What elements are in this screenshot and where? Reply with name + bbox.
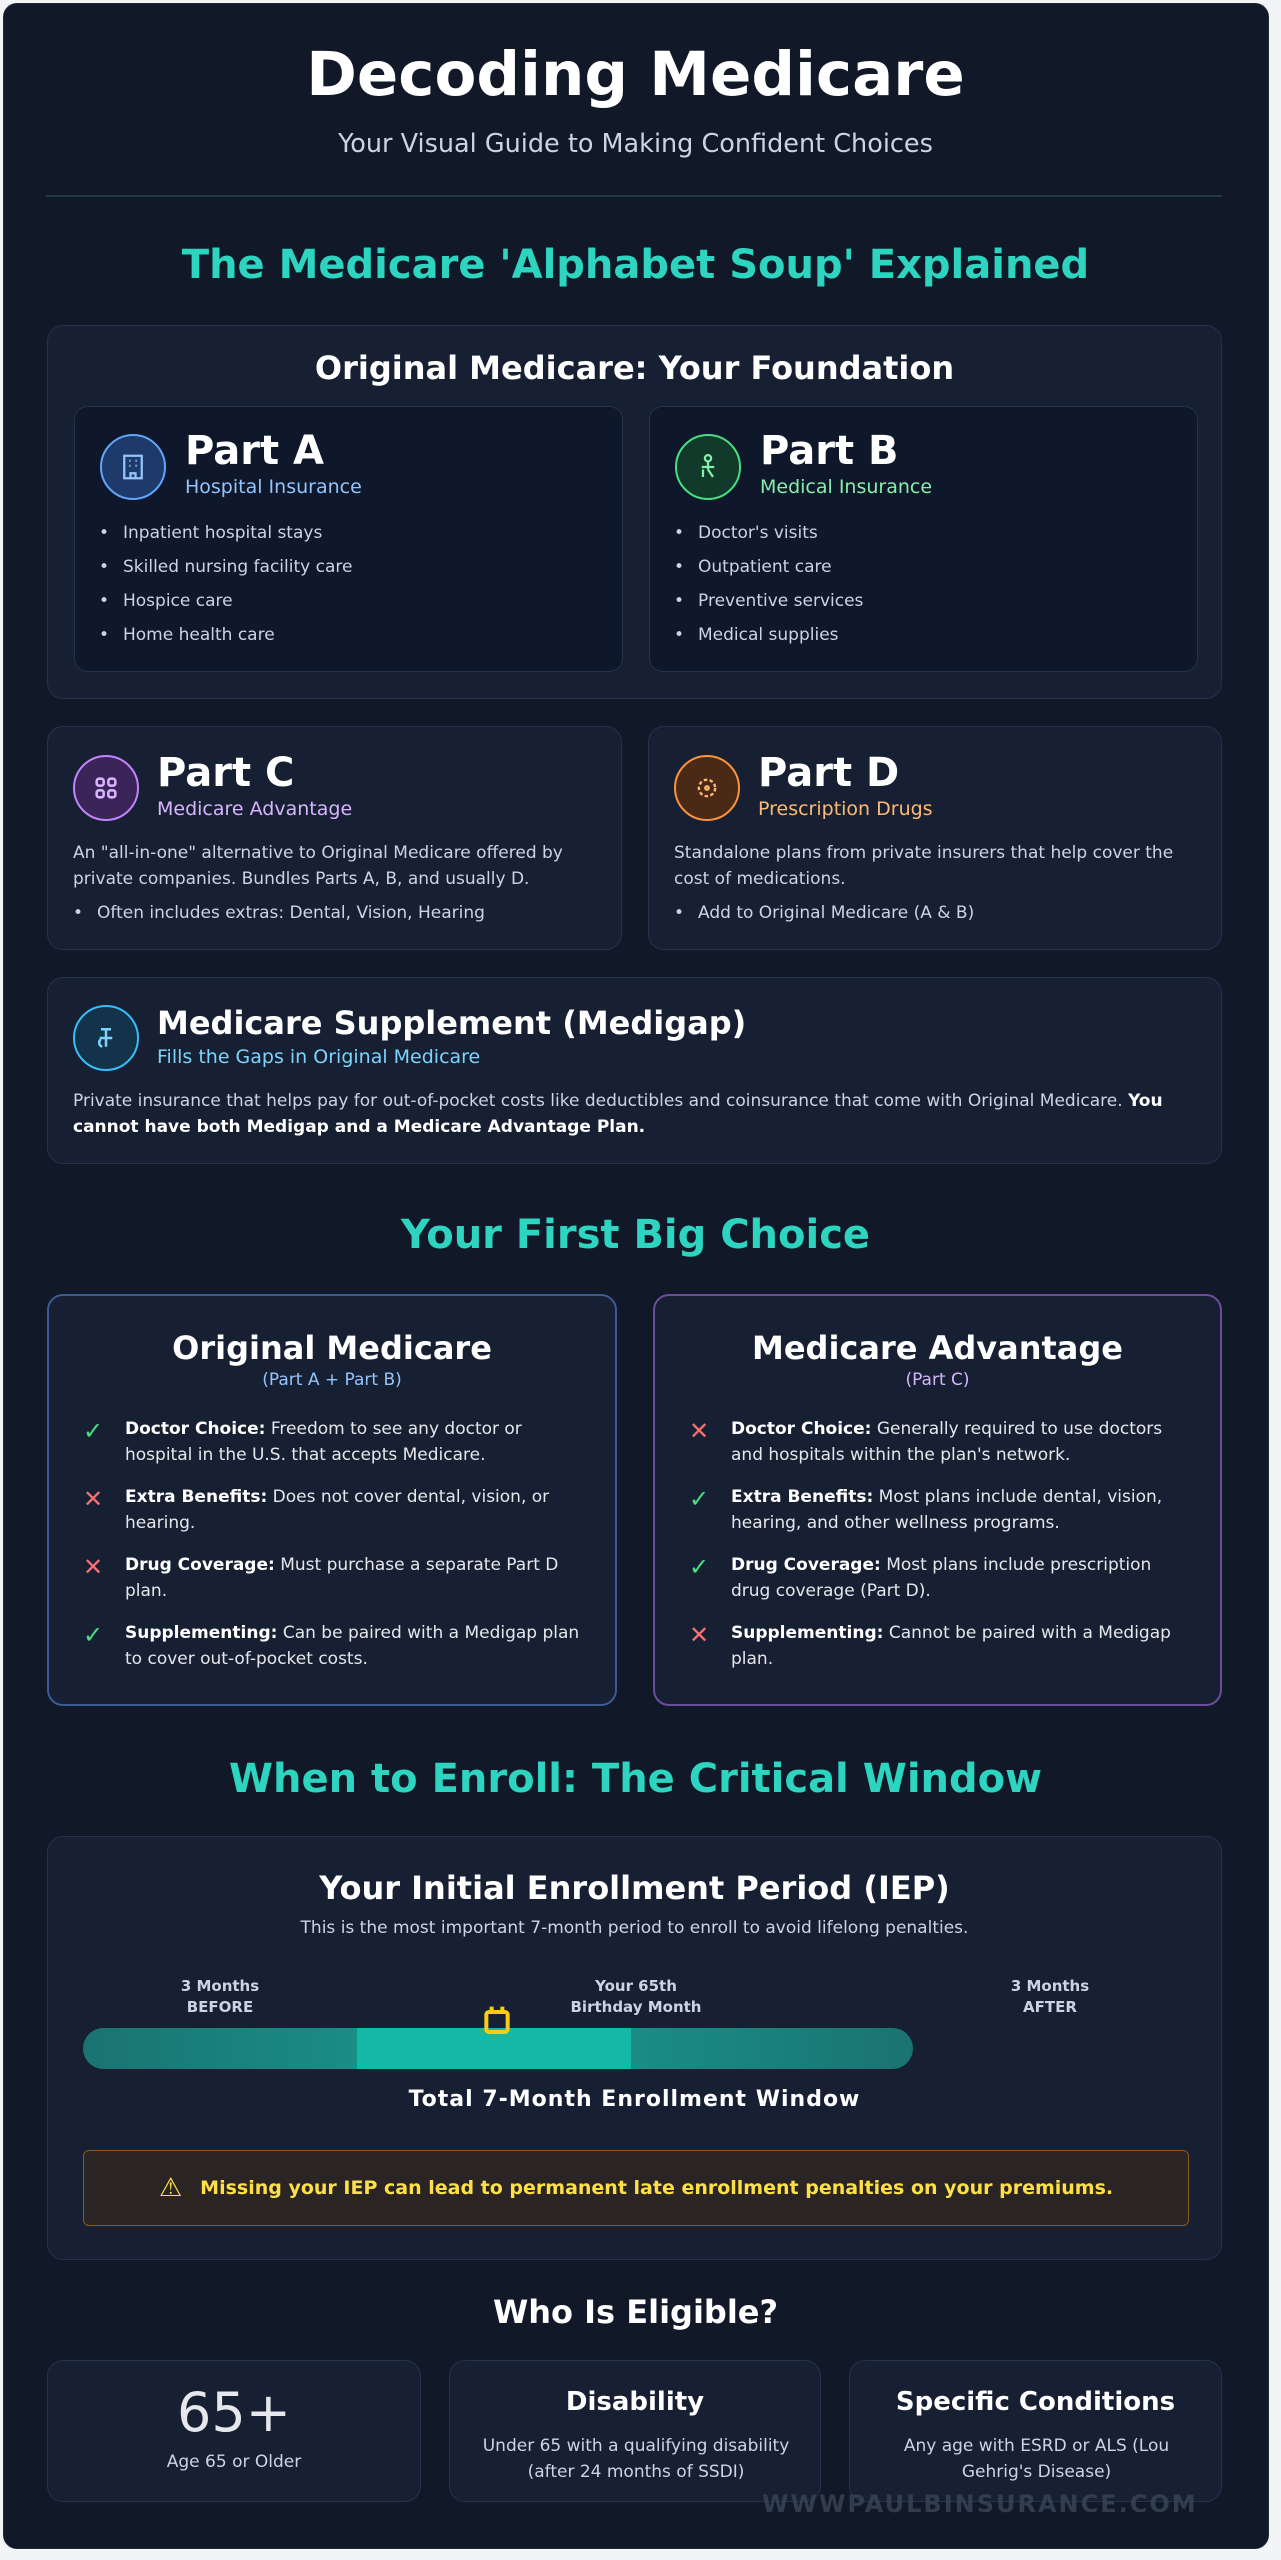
subtitle: (Part A + Part B) <box>262 1370 402 1390</box>
heading: first big choice: Your First Big Choice <box>401 1212 870 1258</box>
icon: hospital <box>100 434 166 500</box>
subtitle part D: Prescription Drugs <box>758 798 933 820</box>
list part A: Inpatient hospital stays <box>123 523 322 543</box>
panel: medicare advantage comparison: ✓ <box>689 1485 709 1513</box>
label after: AFTER <box>1023 1998 1077 2016</box>
list part B: Outpatient care <box>698 557 832 577</box>
list part A: Home health care <box>123 625 275 645</box>
list: Doctor Choice: Freedom to see any doctor or hospital in the U.S. that accepts Medicare. <box>125 1419 522 1465</box>
subtitle part A: Hospital Insurance <box>185 476 362 498</box>
panel: original medicare comparison: ✓ <box>83 1417 103 1445</box>
title: Decoding Medicare <box>306 39 965 110</box>
subtitle: (Part C) <box>905 1370 970 1390</box>
callout warning: Missing your IEP can lead to permanent late enrollment penalties on your premiums. <box>200 2177 1113 2199</box>
title: Medicare Advantage <box>752 1329 1123 1367</box>
list <box>689 1417 1171 1669</box>
watermark: WWWPAULBINSURANCE.COM <box>762 2490 1198 2518</box>
list part A: Hospice care <box>123 591 233 611</box>
icon: pill <box>674 755 740 821</box>
title medigap: Medicare Supplement (Medigap) <box>157 1004 746 1042</box>
card: 65+: Age 65 or Older <box>167 2452 301 2472</box>
card: disability: Under 65 with a qualifying disability (after 24 months of SSDI) <box>483 2436 789 2482</box>
panel: medicare advantage comparison: ✓ <box>689 1553 709 1581</box>
label before: 3 Months <box>181 1977 259 1995</box>
list part B: Medical supplies <box>698 625 839 645</box>
label after: 3 Months <box>1011 1977 1089 1995</box>
panel: original medicare foundation <box>47 325 1222 699</box>
text part C: An "all-in-one" alternative to Original Medicare offered by private companies. Bundles Parts A, B, and usually D. <box>73 843 563 889</box>
card: 65+: 65+ <box>177 2381 291 2444</box>
subtitle part C: Medicare Advantage <box>157 798 352 820</box>
heading: foundation: Original Medicare: Your Foundation <box>315 349 954 387</box>
callout warning <box>83 2150 1189 2226</box>
panel: original medicare comparison: ✓ <box>83 1621 103 1649</box>
list part A: Skilled nursing facility care <box>123 557 352 577</box>
panel: medicare advantage comparison: ✕ <box>689 1621 709 1649</box>
title: Original Medicare <box>172 1329 492 1367</box>
card: disability: Disability <box>566 2387 704 2417</box>
bullet part D: • <box>674 903 684 923</box>
panel: medicare advantage comparison: ✕ <box>689 1417 709 1445</box>
card: specific conditions: Any age with ESRD or ALS (Lou Gehrig's Disease) <box>904 2436 1169 2482</box>
heading: who is eligible: Who Is Eligible? <box>493 2293 778 2331</box>
icon: calendar <box>484 2006 510 2034</box>
list part B: Doctor's visits <box>698 523 818 543</box>
heading: alphabet soup: The Medicare 'Alphabet Soup' Explained <box>182 242 1089 288</box>
list: Doctor Choice: Generally required to use doctors and hospitals within the plan's network. <box>731 1419 1162 1465</box>
card: part B <box>649 406 1198 672</box>
list: Drug Coverage: Must purchase a separate Part D plan. <box>125 1555 558 1601</box>
bullet part D: Add to Original Medicare (A & B) <box>698 903 974 923</box>
text part D: Standalone plans from private insurers that help cover the cost of medications. <box>674 843 1173 889</box>
subtitle part B: Medical Insurance <box>760 476 932 498</box>
card: specific conditions: Specific Conditions <box>896 2387 1175 2417</box>
icon: person <box>675 434 741 500</box>
card: disability <box>449 2360 821 2502</box>
icon: grid <box>73 755 139 821</box>
panel: original medicare comparison <box>47 1294 617 1706</box>
title part A: Part A <box>185 428 324 474</box>
panel: original medicare comparison: ✕ <box>83 1485 103 1513</box>
card: 65+ <box>47 2360 421 2502</box>
icon: medigap <box>73 1005 139 1071</box>
text IEP: This is the most important 7-month period to enroll to avoid lifelong penalties. <box>301 1918 968 1938</box>
label before <box>181 1977 259 2016</box>
callout warning: ⚠ <box>159 2173 182 2203</box>
list part A <box>102 523 352 645</box>
label birthday <box>570 1977 701 2016</box>
card: specific conditions <box>849 2360 1222 2502</box>
label before: BEFORE <box>187 1998 253 2016</box>
list: Extra Benefits: Does not cover dental, vision, or hearing. <box>125 1487 549 1533</box>
card: part A <box>74 406 623 672</box>
subtitle medigap: Fills the Gaps in Original Medicare <box>157 1046 480 1068</box>
title part B: Part B <box>760 428 898 474</box>
panel: IEP <box>47 1836 1222 2260</box>
title part C: Part C <box>157 750 294 796</box>
heading IEP: Your Initial Enrollment Period (IEP) <box>319 1869 950 1907</box>
subtitle: Your Visual Guide to Making Confident Choices <box>338 129 933 159</box>
card: part C <box>47 726 622 950</box>
list part B: Preventive services <box>698 591 863 611</box>
bullet part C: Often includes extras: Dental, Vision, Hearing <box>97 903 485 923</box>
card: part D <box>648 726 1222 950</box>
panel: original medicare comparison: ✕ <box>83 1553 103 1581</box>
list part B <box>676 523 863 645</box>
list: Drug Coverage: Most plans include prescription drug coverage (Part D). <box>731 1555 1151 1601</box>
bullet part C: • <box>73 903 83 923</box>
list <box>83 1417 579 1669</box>
list: Supplementing: Cannot be paired with a Medigap plan. <box>731 1623 1171 1669</box>
label after <box>1011 1977 1089 2016</box>
list: Supplementing: Can be paired with a Medigap plan to cover out-of-pocket costs. <box>125 1623 579 1669</box>
heading: when to enroll: When to Enroll: The Critical Window <box>229 1756 1042 1802</box>
card: medigap <box>47 977 1222 1164</box>
title part D: Part D <box>758 750 899 796</box>
list: Extra Benefits: Most plans include dental, vision, hearing, and other wellness programs. <box>731 1487 1162 1533</box>
caption total: Total 7-Month Enrollment Window <box>409 2087 860 2112</box>
label birthday: Birthday Month <box>570 1998 701 2016</box>
panel: medicare advantage comparison <box>653 1294 1222 1706</box>
text medigap: Private insurance that helps pay for out-of-pocket costs like deductibles and coinsurance that come with Original Medicare. You cannot have both Medigap and a Medicare Advantage Plan. <box>73 1091 1163 1137</box>
label birthday: Your 65th <box>595 1977 677 1995</box>
timeline bar <box>83 2028 913 2069</box>
